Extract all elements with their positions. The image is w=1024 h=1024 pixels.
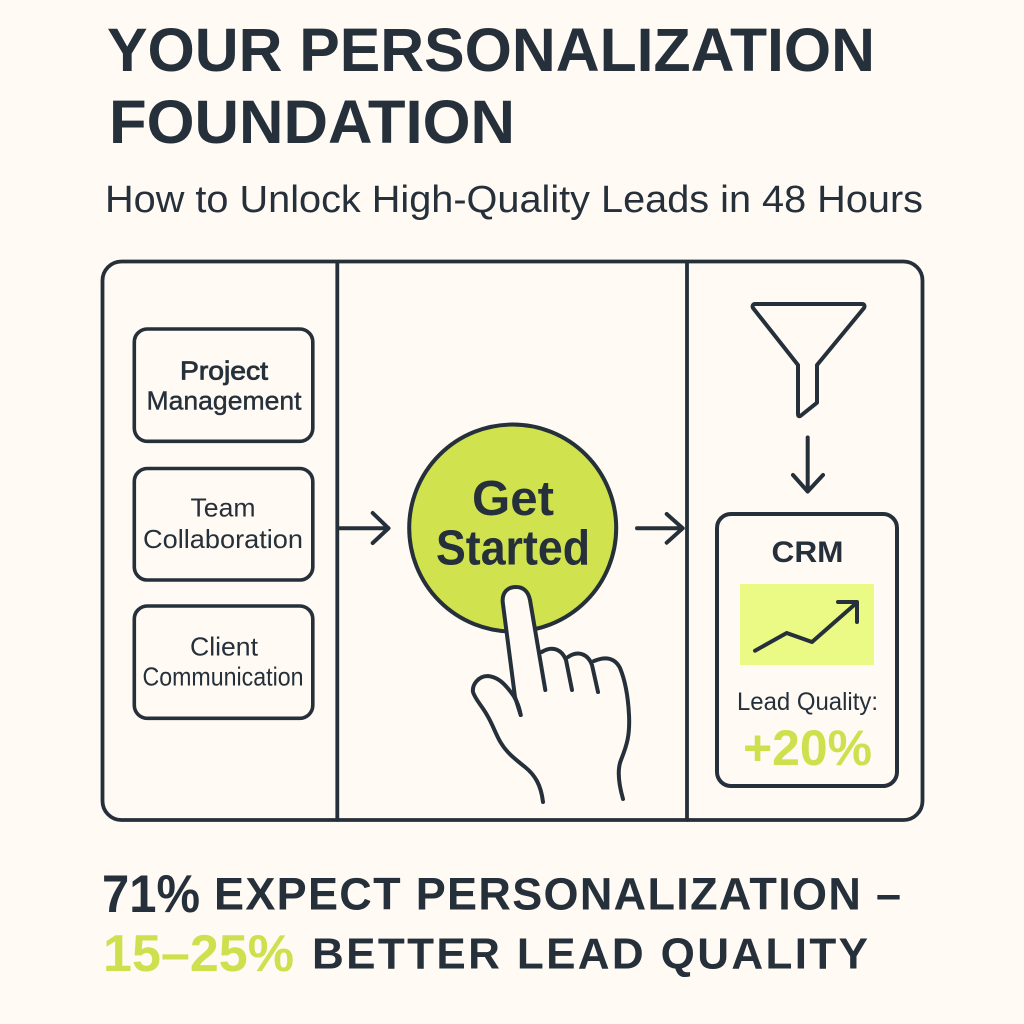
footer: line two xyxy=(103,925,868,983)
card: client communication: Client xyxy=(190,632,259,662)
icon: funnel xyxy=(753,304,864,416)
button: get started: Started xyxy=(436,522,590,576)
card: team collaboration: Team xyxy=(190,492,256,522)
button: get started: Get xyxy=(472,472,554,526)
card: project management: Project xyxy=(180,356,269,386)
title xyxy=(107,16,875,156)
subtitle: How to Unlock High-Quality Leads in 48 Hours xyxy=(105,179,923,221)
title: YOUR PERSONALIZATION xyxy=(107,16,875,84)
heading: crm: CRM xyxy=(772,536,844,569)
card: project management: Management xyxy=(146,386,302,416)
card: project management xyxy=(134,329,313,441)
arrow: button to crm xyxy=(637,514,683,543)
panel: main frame xyxy=(102,262,922,820)
footer: line one: EXPECT PERSONALIZATION – xyxy=(214,868,901,919)
panel: tools xyxy=(134,329,313,718)
card: client communication xyxy=(134,606,313,718)
label: lead quality: Lead Quality: xyxy=(737,688,878,716)
button: get started xyxy=(409,424,616,632)
card: team collaboration xyxy=(134,468,313,580)
footer: line two: 15–25% xyxy=(103,925,294,983)
icon: pointing hand xyxy=(473,587,629,802)
arrow: funnel to crm xyxy=(793,438,823,492)
card: team collaboration: Collaboration xyxy=(143,524,303,554)
title: FOUNDATION xyxy=(109,88,515,156)
footer: line one: 71% xyxy=(102,865,200,924)
arrow: tools to button xyxy=(339,513,388,543)
stat: +20%: +20% xyxy=(743,720,872,776)
footer: line two: BETTER LEAD QUALITY xyxy=(312,929,868,978)
panel: crm xyxy=(717,514,897,786)
card: client communication: Communication xyxy=(142,662,304,692)
chart: growth line xyxy=(740,584,874,665)
